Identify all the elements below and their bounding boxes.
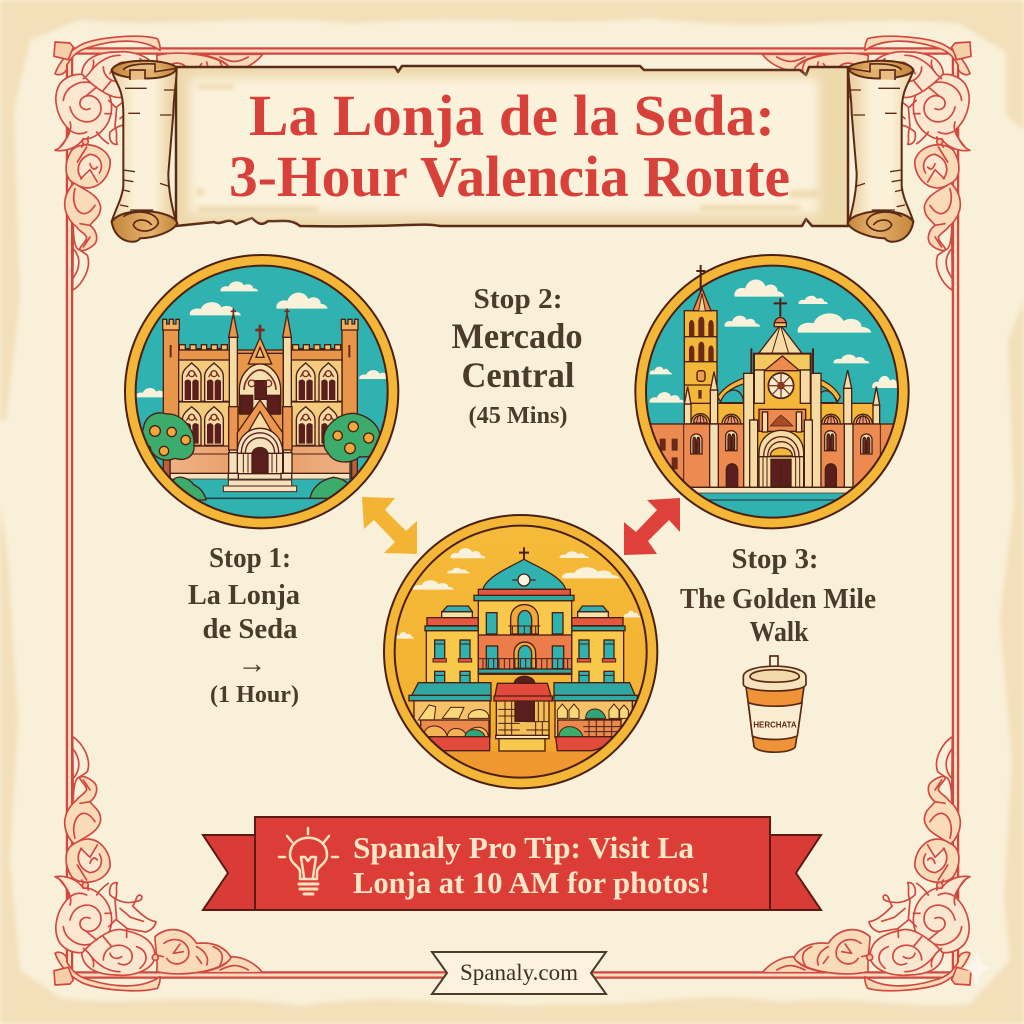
parchment blotches bbox=[196, 84, 820, 213]
produce right bbox=[557, 704, 628, 718]
corner ornament: bottom left bbox=[54, 737, 263, 991]
stop 2 label: Mercado bbox=[452, 316, 582, 356]
right scroll roll bbox=[848, 61, 913, 242]
ribbon right tail bbox=[770, 835, 821, 910]
stop 3 label: The Golden Mile bbox=[680, 584, 876, 615]
lower windows bbox=[514, 642, 536, 668]
gothic windows bbox=[182, 363, 201, 402]
ribbon left tail bbox=[203, 835, 255, 910]
central facade bbox=[744, 373, 754, 487]
badge shape bbox=[432, 952, 606, 994]
corner ornament: top right bbox=[762, 36, 971, 290]
stop 2 illustration: Mercado Central bbox=[379, 510, 662, 793]
stop 1 illustration: La Lonja bbox=[120, 250, 403, 536]
red crates bbox=[429, 737, 490, 751]
inner sheet highlight bbox=[190, 78, 818, 214]
market stalls bbox=[409, 683, 637, 751]
spire cross inside bbox=[774, 298, 787, 317]
parchment scroll sheet bbox=[176, 66, 848, 226]
stop 3 label: Walk bbox=[750, 617, 809, 648]
icon: light bulb bbox=[279, 828, 338, 894]
lower wall bbox=[644, 424, 904, 487]
stop 1 label: La Lonja bbox=[188, 579, 300, 611]
ribbon centre bbox=[255, 817, 770, 910]
website text: Spanaly.com bbox=[460, 960, 578, 985]
stop 3 illustration: Cathedral bbox=[630, 250, 914, 533]
portal bbox=[759, 430, 804, 487]
ground bbox=[446, 752, 594, 760]
stop 3 label: Stop 3: bbox=[732, 543, 818, 575]
stop 3 label bbox=[680, 543, 876, 648]
side pillars bbox=[750, 420, 758, 487]
left scroll roll bbox=[112, 61, 177, 242]
buttress pinnacles bbox=[684, 370, 880, 424]
title line 2: 3-Hour Valencia Route bbox=[229, 144, 790, 209]
salmon base bbox=[170, 446, 350, 474]
mid wall bbox=[685, 403, 875, 424]
bell tower bbox=[684, 311, 717, 421]
icon: horchata cup: HERCHATA bbox=[753, 719, 797, 729]
corner ornament: top left bbox=[54, 36, 263, 290]
rose window bbox=[768, 373, 794, 398]
stop 1 label: → bbox=[238, 648, 266, 680]
stop 1 label: de Seda bbox=[202, 613, 298, 645]
upper windows bbox=[511, 605, 538, 634]
stop 1 label: Stop 1: bbox=[209, 543, 291, 574]
stop 1 label: (1 Hour) bbox=[210, 682, 299, 708]
title banner bbox=[112, 61, 913, 242]
tip ribbon bbox=[203, 817, 821, 910]
title line 1: La Lonja de la Seda: bbox=[249, 83, 775, 148]
rondels bbox=[691, 414, 710, 424]
stop 2 label: Central bbox=[462, 355, 574, 395]
ribbon text line 1: Spanaly Pro Tip: Visit La bbox=[353, 830, 695, 865]
footer badge bbox=[432, 952, 606, 994]
arrow: yellow between stop 1 and stop 2 bbox=[362, 497, 417, 554]
wing windows bbox=[433, 640, 446, 662]
ribbon text line 2: Lonja at 10 AM for photos! bbox=[353, 865, 710, 900]
wings bbox=[426, 631, 478, 686]
centre stall bbox=[496, 701, 549, 738]
orange trees bbox=[142, 413, 380, 500]
ornamental frame bbox=[70, 51, 956, 975]
buttress arcs bbox=[718, 377, 745, 402]
plinth bbox=[691, 486, 852, 494]
water and steps bbox=[172, 479, 351, 480]
stop 2 label: (45 Mins) bbox=[468, 403, 568, 429]
stop 1 label bbox=[188, 543, 300, 708]
roof tent bbox=[759, 325, 802, 353]
produce left bbox=[418, 705, 489, 722]
central bay bbox=[228, 308, 292, 479]
stop 2 label bbox=[452, 283, 582, 429]
watermark sparkle bbox=[961, 948, 993, 990]
awnings bbox=[409, 683, 491, 701]
central block bbox=[478, 601, 572, 636]
stop 2 label: Stop 2: bbox=[474, 283, 562, 315]
corner ornament: bottom right bbox=[762, 737, 971, 991]
towers bbox=[163, 319, 358, 447]
icon: horchata cup bbox=[743, 656, 806, 752]
arrow: red between stop 2 and stop 3 bbox=[624, 498, 680, 555]
tower cross poking out of ring bbox=[696, 265, 705, 292]
